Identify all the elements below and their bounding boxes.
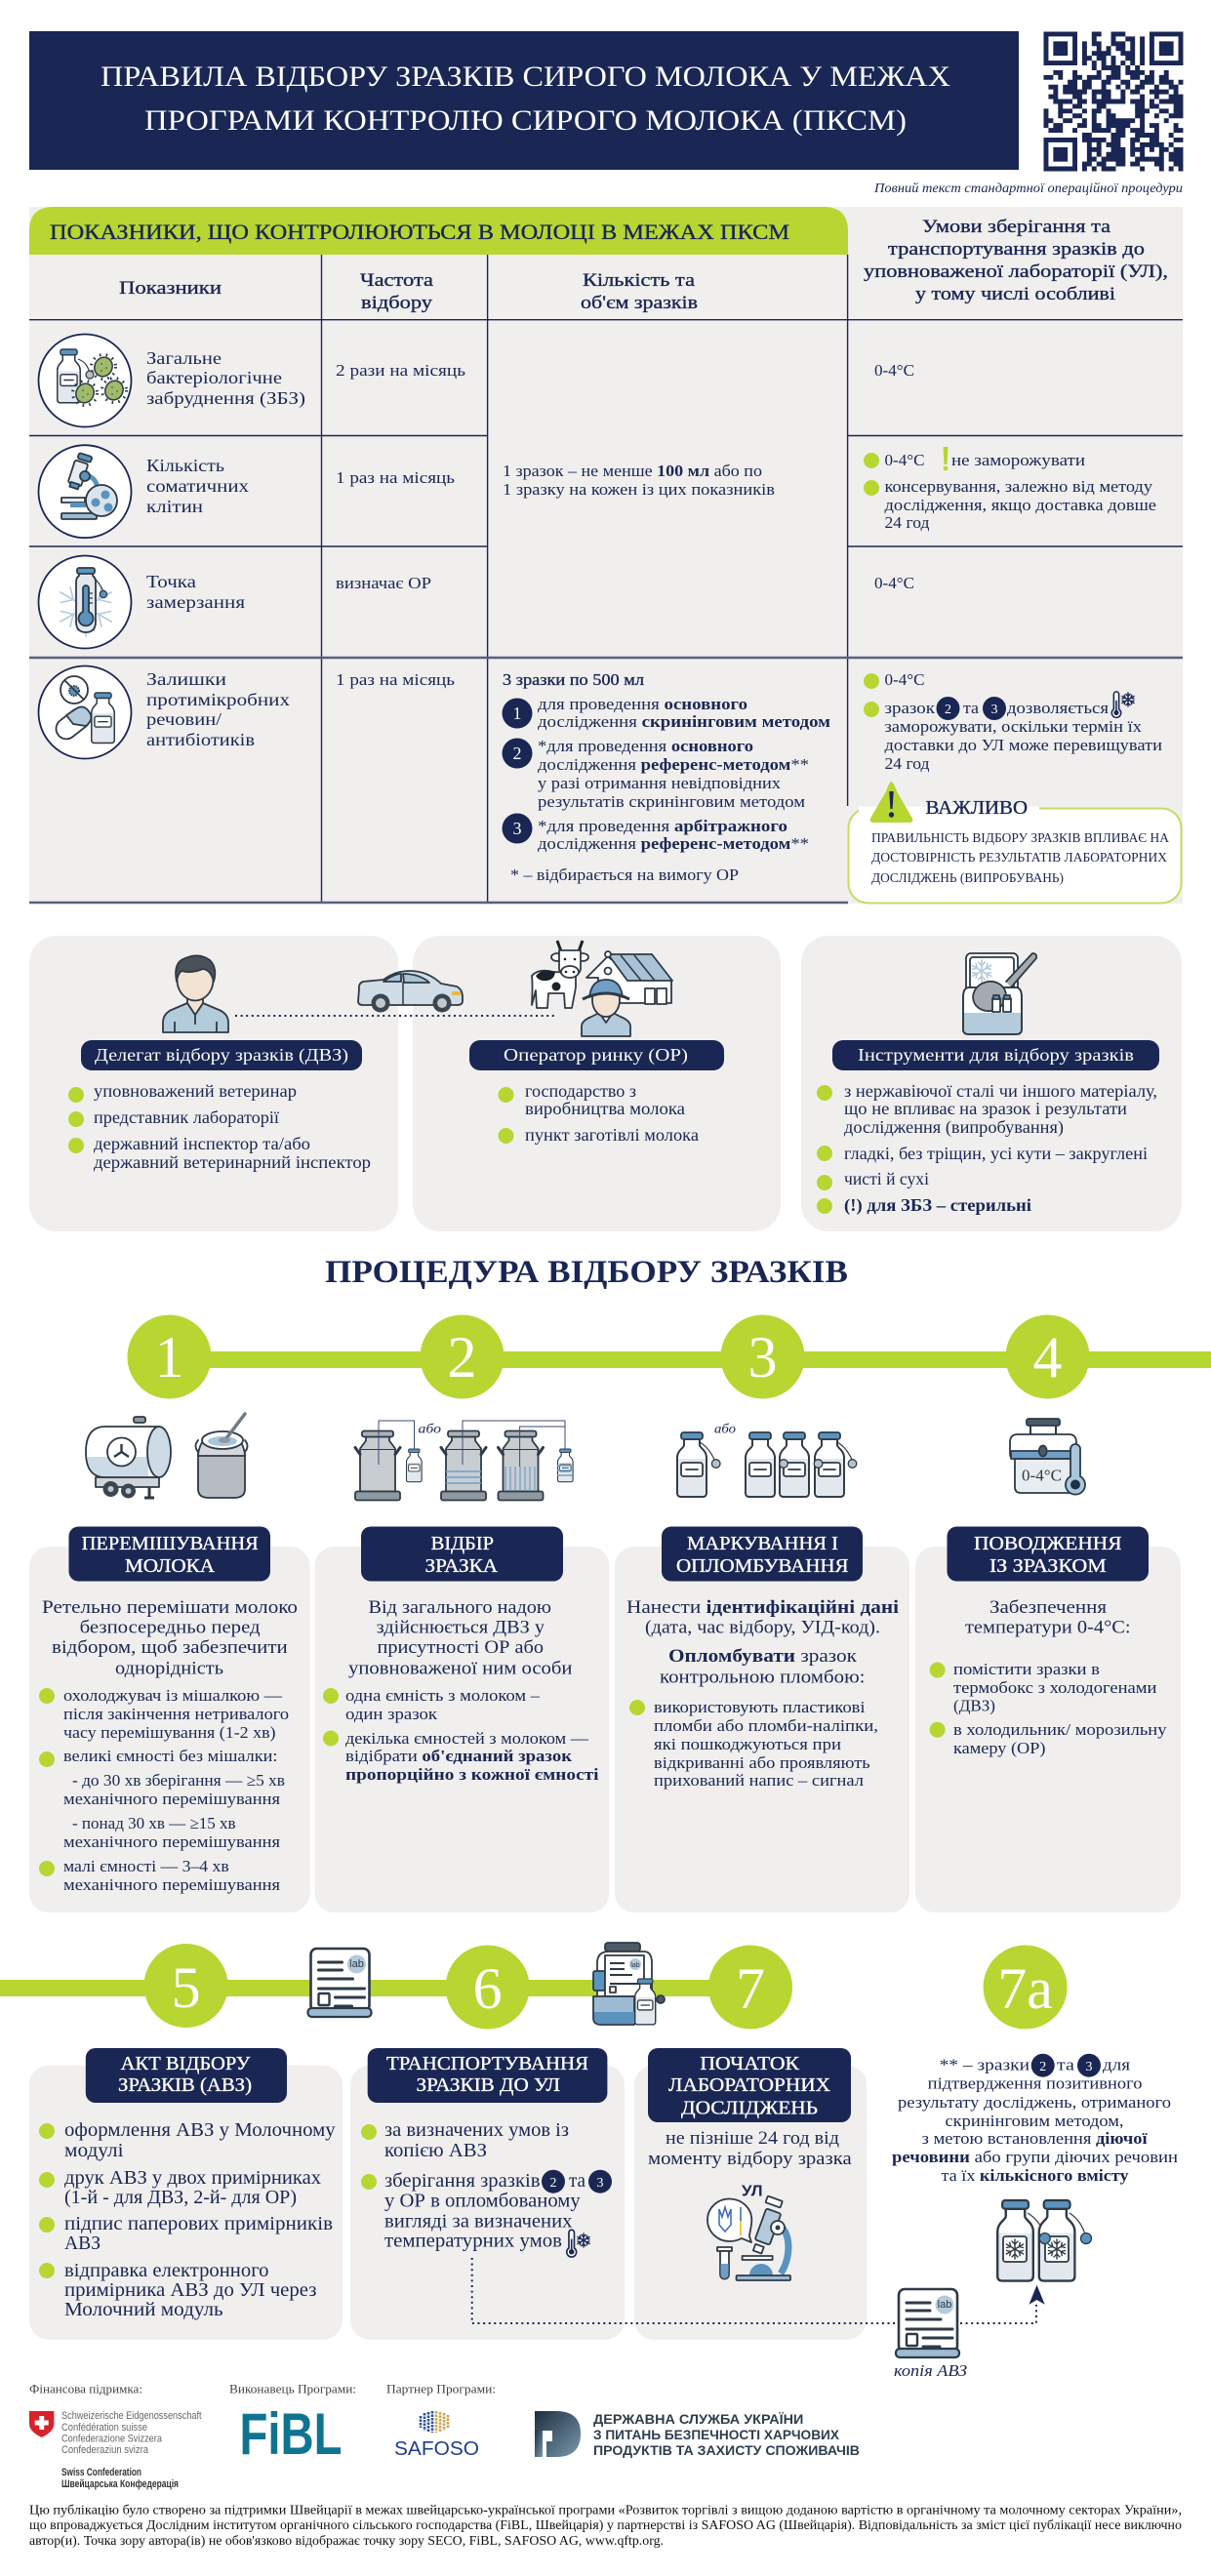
tools list: чисті й сухі xyxy=(844,1169,929,1188)
row label: somatic cells: Кількість xyxy=(146,456,224,475)
row label: bacterial xyxy=(146,348,305,409)
list: step 6: температурних умов xyxy=(384,2232,562,2252)
icon: report copy xyxy=(896,2289,959,2357)
icon: sealed bottles xyxy=(677,1423,857,1497)
text: step 7a note xyxy=(892,2054,1178,2185)
step number 1 xyxy=(127,1315,211,1399)
intro: step 2: Від загального надою xyxy=(369,1597,551,1618)
operator list: пункт заготівлі молока xyxy=(525,1125,699,1145)
intro: step 3: (дата, час відбору, УІД-код). xyxy=(645,1618,880,1637)
samples for antibiotics: * – відбирається на вимогу ОР xyxy=(510,865,739,884)
icon: sealed bottles: або xyxy=(714,1423,736,1436)
intro: step 2 xyxy=(348,1597,572,1678)
text: step 7 deadline: моменту відбору зразка xyxy=(648,2150,852,2169)
pill: step 5 xyxy=(86,2048,287,2103)
merged sample quantity xyxy=(503,462,775,499)
icon: milk cans with sampling lines: або xyxy=(418,1423,441,1436)
frequency: freezing: визначає ОР xyxy=(336,574,431,592)
list: step 3: прихований напис – сигнал xyxy=(654,1771,864,1790)
pill: step 1: ПЕРЕМІШУВАННЯ xyxy=(82,1534,259,1554)
icon: cool box and spoon xyxy=(963,953,1036,1034)
tools list: (!) для ЗБЗ – стерильні xyxy=(844,1195,1031,1215)
list: step 3: пломби або пломби-наліпки, xyxy=(654,1716,878,1735)
operator list: виробництва молока xyxy=(525,1099,685,1118)
samples for antibiotics: дослідження скринінговим методом xyxy=(538,712,830,731)
icon: delegate person xyxy=(163,955,228,1032)
list: step 5: примірника АВЗ до УЛ через xyxy=(64,2280,317,2301)
logo: Swiss Confederation: Confédération suisse xyxy=(61,2422,147,2434)
footer: sponsor labels: Фінансова підримка: xyxy=(29,2382,142,2396)
column headers: уповноваженої лабораторії (УЛ), xyxy=(864,262,1168,282)
list: step 1 xyxy=(39,1686,289,1894)
disclaimer: автор(и). Точка зору автора(ів) не обов'язково відображає точку зору SECO, FiBL, SAFOSO AG, www.qftp.org. xyxy=(29,2533,664,2548)
panel: indicators table xyxy=(29,207,1183,904)
list: step 6: у ОР в опломбованому xyxy=(384,2192,581,2212)
logo text: state service: ДЕРЖАВНА СЛУЖБА УКРАЇНИ xyxy=(593,2411,803,2427)
column headers: Кількість та xyxy=(583,271,695,291)
intro: step 1 xyxy=(42,1597,298,1678)
list: step 1: - до 30 хв зберігання — ≥5 хв xyxy=(72,1771,285,1790)
list: step 6: зберігання зразків xyxy=(384,2171,541,2192)
step number 2: 2 xyxy=(447,1325,476,1389)
pill: step 2: ЗРАЗКА xyxy=(425,1556,498,1577)
list: step 1: великі ємності без мішалки: xyxy=(63,1747,277,1765)
icon: microscope with Ukrainian trident xyxy=(707,2196,790,2280)
list: step 3: використовують пластикові xyxy=(654,1698,866,1716)
pill: delegate xyxy=(81,1040,362,1070)
text: step 7a note: з метою встановлення діючої xyxy=(922,2129,1148,2148)
pill: step 6: ТРАНСПОРТУВАННЯ xyxy=(386,2054,588,2074)
delegate list xyxy=(68,1081,371,1172)
pill: delegate: Делегат відбору зразків (ДВЗ) xyxy=(95,1045,348,1066)
text: step 7a note: 3 xyxy=(1085,2060,1093,2074)
column headers xyxy=(119,218,1168,313)
list: step 6: вигляді за визначених xyxy=(384,2212,573,2233)
callout: important: ДОСТОВІРНІСТЬ РЕЗУЛЬТАТІВ ЛАБОРАТОРНИХ xyxy=(871,850,1167,865)
icon: milk can with stirrer xyxy=(195,1414,248,1498)
frequency: bacterial: 2 рази на місяць xyxy=(336,361,466,380)
panel: step 3 labelling xyxy=(615,1526,909,1912)
icon: cooling tank xyxy=(86,1417,171,1499)
pill: step 1: МОЛОКА xyxy=(125,1556,215,1577)
intro: step 2: здійснюється ДВЗ у xyxy=(377,1618,545,1637)
list: step 4: (ДВЗ) xyxy=(953,1696,995,1715)
storage: somatic: консервування, залежно від методу xyxy=(884,477,1153,496)
storage: antibiotics: доставки до УЛ може перевищувати xyxy=(884,736,1162,754)
step number 1: 1 xyxy=(154,1325,183,1389)
intro: step 2: присутності ОР або xyxy=(377,1637,544,1658)
disclaimer xyxy=(29,2503,1182,2548)
text: step 7a note: для xyxy=(1103,2056,1130,2074)
footer: sponsor labels: Партнер Програми: xyxy=(386,2382,496,2396)
logo: Swiss Confederation xyxy=(29,2410,202,2490)
text: step 7a note: та xyxy=(1057,2056,1075,2074)
storage: antibiotics: 3 xyxy=(991,703,997,717)
list: step 3: які пошкоджуються при xyxy=(654,1735,841,1753)
list: step 2: декілька ємностей з молоком — xyxy=(345,1729,589,1748)
callout: important xyxy=(849,782,1181,904)
list: step 4: камеру (ОР) xyxy=(953,1739,1046,1757)
tools list: з нержавіючої сталі чи іншого матеріалу, xyxy=(844,1081,1157,1101)
step number 7a xyxy=(984,1946,1068,2030)
logo: Swiss Confederation: Swiss Confederation xyxy=(61,2467,141,2478)
intro: step 4 xyxy=(965,1597,1131,1637)
row label: somatic cells: клітин xyxy=(146,497,203,516)
text: step 7a note: результату досліджень, отриманого xyxy=(898,2093,1171,2112)
step number 6: 6 xyxy=(473,1956,503,2021)
icon: cow xyxy=(532,941,588,1008)
column headers: об'єм зразків xyxy=(581,294,698,313)
panel: step 5 report xyxy=(29,2048,343,2340)
step number 7a: 7a xyxy=(997,1956,1053,2021)
icon: antibiotics xyxy=(39,665,131,759)
icon: bacteria and bottle xyxy=(39,334,131,427)
list: step 5 xyxy=(39,2120,336,2320)
step number 7: 7 xyxy=(736,1956,765,2021)
intro: step 4: Забезпечення xyxy=(989,1597,1107,1618)
label: laboratory: УЛ xyxy=(742,2184,763,2200)
storage: somatic: не заморожувати xyxy=(951,451,1085,469)
list: step 2: відібрати об'єднаний зразок xyxy=(345,1747,573,1765)
step number 4: 4 xyxy=(1032,1325,1062,1389)
pill: tools xyxy=(832,1040,1159,1070)
step number 5 xyxy=(144,1944,228,2028)
footer: sponsor labels xyxy=(29,2382,496,2396)
pill: step 3 xyxy=(662,1526,863,1581)
pill: operator: Оператор ринку (ОР) xyxy=(504,1045,688,1066)
step number 3: 3 xyxy=(747,1325,777,1389)
tools list: дослідження (випробування) xyxy=(844,1117,1064,1137)
storage: antibiotics: та xyxy=(963,699,980,717)
pill: step 2: ВІДБІР xyxy=(431,1534,494,1554)
panel: market operator xyxy=(413,936,781,1231)
samples for antibiotics: для проведення основного xyxy=(538,695,747,713)
list: step 4: помістити зразки в xyxy=(953,1660,1100,1678)
samples for antibiotics xyxy=(502,670,830,884)
pill: operator xyxy=(469,1040,724,1070)
column headers: у тому числі особливі xyxy=(915,285,1115,304)
pill: step 7: ДОСЛІДЖЕНЬ xyxy=(681,2099,818,2119)
list: step 5: (1-й - для ДВЗ, 2-й- для ОР) xyxy=(64,2188,297,2208)
logo: FiBL: FiBL xyxy=(240,2401,342,2467)
disclaimer: що впроваджується Дослідним інститутом органічного сільського господарства (FiBL, Швейцарія) у партнерстві із SAFOSO AG (Швейцарія). Відповідальність за зміст цієї публікації несе виключно xyxy=(29,2517,1182,2532)
column headers: транспортування зразків до xyxy=(888,240,1145,260)
icon: sampling report document: lab xyxy=(349,1958,364,1970)
storage: somatic: 24 год xyxy=(884,513,930,532)
list: step 6: за визначених умов із xyxy=(384,2120,569,2141)
samples for antibiotics: *для проведення арбітражного xyxy=(538,817,787,835)
list: step 5: підпис паперових примірників xyxy=(64,2214,333,2234)
table heading tab: ПОКАЗНИКИ, ЩО КОНТРОЛЮЮТЬСЯ В МОЛОЦІ В МЕЖАХ ПКСМ xyxy=(50,220,789,244)
logo: SAFOSO: SAFOSO xyxy=(394,2438,479,2460)
icon: cool box with thermometer: 0-4°C xyxy=(1022,1466,1062,1485)
list: step 6: 3 xyxy=(597,2176,603,2191)
intro: step 3: контрольною пломбою: xyxy=(660,1667,865,1688)
step number 2 xyxy=(420,1315,504,1399)
list: step 4 xyxy=(930,1660,1167,1757)
step number 3 xyxy=(720,1315,804,1399)
list: step 4: в холодильник/ морозильну xyxy=(953,1720,1167,1739)
operator list xyxy=(498,1081,699,1145)
delegate list: державний інспектор та/або xyxy=(94,1134,310,1153)
storage: antibiotics xyxy=(864,670,1162,773)
callout: important: ПРАВИЛЬНІСТЬ ВІДБОРУ ЗРАЗКІВ ВПЛИВАЄ НА xyxy=(871,830,1169,845)
list: step 6: 2 xyxy=(550,2176,556,2191)
samples for antibiotics: 3 xyxy=(513,819,521,838)
panel: step 1 mixing xyxy=(29,1526,310,1912)
logo: Swiss Confederation: Confederazione Svizzera xyxy=(61,2434,163,2445)
icon: warning triangle xyxy=(870,782,912,823)
icon: car xyxy=(358,971,463,1013)
samples for antibiotics: *для проведення основного xyxy=(538,737,753,755)
list: step 1: механічного перемішування xyxy=(63,1832,280,1851)
icon: transport case with document and bottle: lab xyxy=(630,1962,640,1969)
list: step 1: - понад 30 хв — ≥15 хв xyxy=(72,1814,236,1832)
frequency: somatic: 1 раз на місяць xyxy=(336,468,456,487)
list: step 5: друк АВЗ у двох примірниках xyxy=(64,2168,321,2189)
pill: step 4 xyxy=(947,1526,1149,1581)
list: step 5: відправка електронного xyxy=(64,2261,269,2281)
text: step 7a note: підтвердження позитивного xyxy=(928,2074,1142,2093)
intro: step 1: безпосередньо перед xyxy=(80,1618,261,1637)
tools list: що не впливає на зразок і результати xyxy=(844,1099,1127,1118)
heading: procedure: ПРОЦЕДУРА ВІДБОРУ ЗРАЗКІВ xyxy=(325,1255,848,1290)
list: step 6: копією АВЗ xyxy=(384,2141,487,2161)
list: step 5: модулі xyxy=(64,2141,124,2161)
pill: step 7 xyxy=(648,2048,851,2122)
row label: freezing point xyxy=(146,572,245,612)
pill: step 5: ЗРАЗКІВ (АВЗ) xyxy=(118,2075,252,2096)
list: step 1: малі ємності — 3–4 хв xyxy=(63,1857,229,1875)
storage: somatic: 0-4°C xyxy=(884,451,925,469)
step number 4 xyxy=(1005,1315,1089,1399)
list: step 2: один зразок xyxy=(345,1705,438,1723)
logo text: state service: ПРОДУКТІВ ТА ЗАХИСТУ СПОЖИВАЧІВ xyxy=(593,2442,860,2458)
list: step 2: пропорційно з кожної ємності xyxy=(345,1765,599,1784)
logo: Swiss Confederation: Schweizerische Eidgenossenschaft xyxy=(61,2410,202,2422)
pill: step 7: ПОЧАТОК xyxy=(700,2054,800,2074)
logo: SAFOSO xyxy=(394,2411,479,2460)
text: step 7a note: 2 xyxy=(1039,2060,1046,2074)
callout: important: ВАЖЛИВО xyxy=(925,797,1028,819)
pill: step 4: ІЗ ЗРАЗКОМ xyxy=(989,1556,1107,1577)
storage: antibiotics: дозволяється xyxy=(1007,699,1109,717)
samples for antibiotics: 2 xyxy=(513,744,521,763)
step number 6 xyxy=(446,1946,530,2030)
pill: step 3: ОПЛОМБУВАННЯ xyxy=(676,1556,849,1577)
intro: step 4: температури 0-4°С: xyxy=(965,1618,1131,1637)
intro: step 1: відбором, щоб забезпечити xyxy=(52,1637,288,1658)
list: step 3: відкриванні або проявляють xyxy=(654,1753,870,1772)
title banner: ПРОГРАМИ КОНТРОЛЮ СИРОГО МОЛОКА (ПКСМ) xyxy=(144,104,907,137)
row label: bacterial: бактеріологічне xyxy=(146,368,282,387)
storage: bacterial: 0-4°C xyxy=(874,361,914,380)
label: report copy: копія АВЗ xyxy=(894,2361,967,2380)
row label: antibiotic residues xyxy=(146,669,290,749)
logo text: state service: З ПИТАНЬ БЕЗПЕЧНОСТІ ХАРЧОВИХ xyxy=(593,2427,840,2442)
row label: freezing point: замерзання xyxy=(146,592,245,612)
samples for antibiotics: у разі отримання невідповідних xyxy=(538,774,782,792)
list: step 1: механічного перемішування xyxy=(63,1790,280,1808)
text: step 7 deadline xyxy=(648,2129,852,2169)
icon: thermometer and snowflake xyxy=(39,556,131,648)
column headers: Показники xyxy=(119,279,222,299)
route: delegate to operator xyxy=(235,1015,555,1017)
row label: antibiotic residues: речовин/ xyxy=(146,709,222,729)
dotted route from storage to arbitration samples xyxy=(472,2258,1036,2323)
pill: step 7: ЛАБОРАТОРНИХ xyxy=(668,2075,830,2096)
list: step 1: часу перемішування (1-2 хв) xyxy=(63,1723,275,1742)
pill: step 6 xyxy=(368,2048,607,2103)
list: step 5: оформлення АВЗ у Молочному xyxy=(64,2120,336,2141)
intro: step 1: однорідність xyxy=(115,1659,223,1678)
delegate list: уповноважений ветеринар xyxy=(94,1081,297,1101)
list: step 2 xyxy=(323,1686,599,1784)
frequency: antibiotics: 1 раз на місяць xyxy=(336,670,456,689)
samples for antibiotics: 3 зразки по 500 мл xyxy=(503,670,644,689)
row label: antibiotic residues: Залишки xyxy=(146,669,226,689)
pill: step 2 xyxy=(361,1526,563,1581)
icon: milk cans with sampling lines xyxy=(355,1421,573,1501)
timeline: steps 5-7 xyxy=(0,1944,792,2030)
intro: step 3 xyxy=(626,1597,899,1688)
intro: step 1: Ретельно перемішати молоко xyxy=(42,1597,298,1618)
pill: step 3: МАРКУВАННЯ І xyxy=(687,1534,838,1554)
delegate list: представник лабораторії xyxy=(94,1107,279,1127)
storage: antibiotics: зразок xyxy=(884,699,936,717)
row label: bacterial: забруднення (ЗБЗ) xyxy=(146,388,305,409)
list: step 2: одна ємність з молоком – xyxy=(345,1686,541,1705)
operator list: господарство з xyxy=(525,1081,636,1101)
pill: step 1 xyxy=(68,1526,270,1581)
delegate list: державний ветеринарний інспектор xyxy=(94,1152,371,1172)
pill: step 6: ЗРАЗКІВ ДО УЛ xyxy=(416,2075,560,2096)
column headers: відбору xyxy=(361,294,433,313)
column headers: Частота xyxy=(360,271,433,291)
arrow head xyxy=(1029,2285,1045,2305)
merged sample quantity: 1 зразку на кожен із цих показників xyxy=(503,480,775,499)
step number 5: 5 xyxy=(172,1955,201,2020)
text: step 7 deadline: не пізніше 24 год від xyxy=(666,2129,839,2149)
intro: step 3: Опломбувати зразок xyxy=(668,1646,858,1667)
storage: antibiotics: 24 год xyxy=(884,754,930,773)
icon: cool box with thermometer xyxy=(1010,1419,1085,1495)
tools list xyxy=(817,1081,1157,1215)
pill: step 5: АКТ ВІДБОРУ xyxy=(121,2054,250,2074)
tools list: гладкі, без тріщин, усі кути – закруглені xyxy=(844,1144,1148,1163)
text: step 7a note: скринінговим методом, xyxy=(945,2112,1124,2130)
row label: antibiotic residues: антибіотиків xyxy=(146,730,255,749)
logo text: state service xyxy=(593,2411,860,2458)
icon: microscope xyxy=(39,445,131,538)
storage: somatic: дослідження, якщо доставка довше xyxy=(884,496,1156,514)
logo: state service mark xyxy=(535,2411,581,2457)
icon: frozen sealed bottles xyxy=(997,2200,1091,2281)
row label: antibiotic residues: протимікробних xyxy=(146,690,290,709)
storage: antibiotics: 2 xyxy=(945,703,951,717)
pill: tools: Інструменти для відбору зразків xyxy=(858,1045,1134,1065)
list: step 6 xyxy=(361,2120,612,2257)
icon: report copy: lab xyxy=(938,2299,951,2311)
pill: step 4: ПОВОДЖЕННЯ xyxy=(974,1534,1122,1554)
storage: antibiotics: 0-4°C xyxy=(884,670,925,689)
storage: freezing: 0-4°C xyxy=(874,574,914,592)
samples for antibiotics: 1 xyxy=(513,704,521,723)
list: step 3 xyxy=(629,1698,878,1790)
panel: step 4 handling xyxy=(915,1526,1181,1912)
QR code xyxy=(1044,31,1183,171)
title banner: ПРАВИЛА ВІДБОРУ ЗРАЗКІВ СИРОГО МОЛОКА У МЕЖАХ xyxy=(101,60,950,93)
row label: somatic cells: соматичних xyxy=(146,476,249,496)
storage: somatic xyxy=(864,447,1156,532)
icon: farm barn xyxy=(586,951,672,1004)
list: step 1: після закінчення нетривалого xyxy=(63,1705,289,1723)
callout: important: ДОСЛІДЖЕНЬ (ВИПРОБУВАНЬ) xyxy=(871,870,1064,885)
table heading tab xyxy=(29,207,848,255)
icon: sampling report document xyxy=(308,1949,371,2017)
list: step 5: Молочний модуль xyxy=(64,2300,223,2320)
samples for antibiotics: результатів скринінговим методом xyxy=(538,792,806,811)
row label: freezing point: Точка xyxy=(146,572,196,591)
text: step 7a note: та їх кількісного вмісту xyxy=(941,2166,1129,2185)
QR caption: Повний текст стандартної операційної процедури xyxy=(873,181,1183,196)
list: step 4: термобокс з холодогенами xyxy=(953,1678,1157,1697)
samples for antibiotics: дослідження референс-методом ** xyxy=(538,834,809,853)
icon: transport case with document and bottle xyxy=(593,1943,665,2025)
panel: step 6 transport xyxy=(350,2048,625,2340)
panel: step 2 sampling xyxy=(314,1526,609,1912)
timeline: steps 1-4 xyxy=(127,1315,1211,1399)
row label: somatic cells xyxy=(146,456,249,516)
icon: farmer xyxy=(582,980,630,1036)
panel: sampling tools xyxy=(801,936,1182,1231)
footer: sponsor labels: Виконавець Програми: xyxy=(229,2382,356,2396)
row label: bacterial: Загальне xyxy=(146,348,222,368)
column headers: Умови зберігання та xyxy=(922,218,1110,237)
intro: step 3: Нанести ідентифікаційні дані xyxy=(626,1597,899,1618)
samples for antibiotics: дослідження референс-методом ** xyxy=(538,755,809,774)
list: step 5: АВЗ xyxy=(64,2234,101,2254)
logo: Swiss Confederation: Confederaziun svizra xyxy=(61,2444,149,2456)
list: step 1: охолоджувач із мішалкою — xyxy=(63,1686,283,1705)
title banner xyxy=(29,31,1019,170)
list: step 6: та xyxy=(569,2171,585,2192)
panel: sampling delegate xyxy=(29,936,398,1231)
text: step 7a note: ** – зразки xyxy=(940,2056,1029,2074)
merged sample quantity: 1 зразок – не менше 100 мл або по xyxy=(503,462,762,480)
step number 7 xyxy=(708,1946,792,2030)
disclaimer: Цю публікацію було створено за підтримки Швейцарії в межах швейцарсько-української програми «Розвиток торгівлі з вищою доданою вартістю в органічному та молочному секторах України», xyxy=(29,2503,1182,2517)
list: step 1: механічного перемішування xyxy=(63,1875,280,1894)
text: step 7a note: речовини або групи діючих речовин xyxy=(892,2148,1178,2166)
logo: Swiss Confederation: Швейцарська Конфедерація xyxy=(61,2478,179,2490)
panel: step 7 laboratory xyxy=(634,2048,867,2340)
intro: step 2: уповноваженої ним особи xyxy=(348,1659,572,1678)
storage: antibiotics: заморожувати, оскільки термін їх xyxy=(884,717,1143,736)
